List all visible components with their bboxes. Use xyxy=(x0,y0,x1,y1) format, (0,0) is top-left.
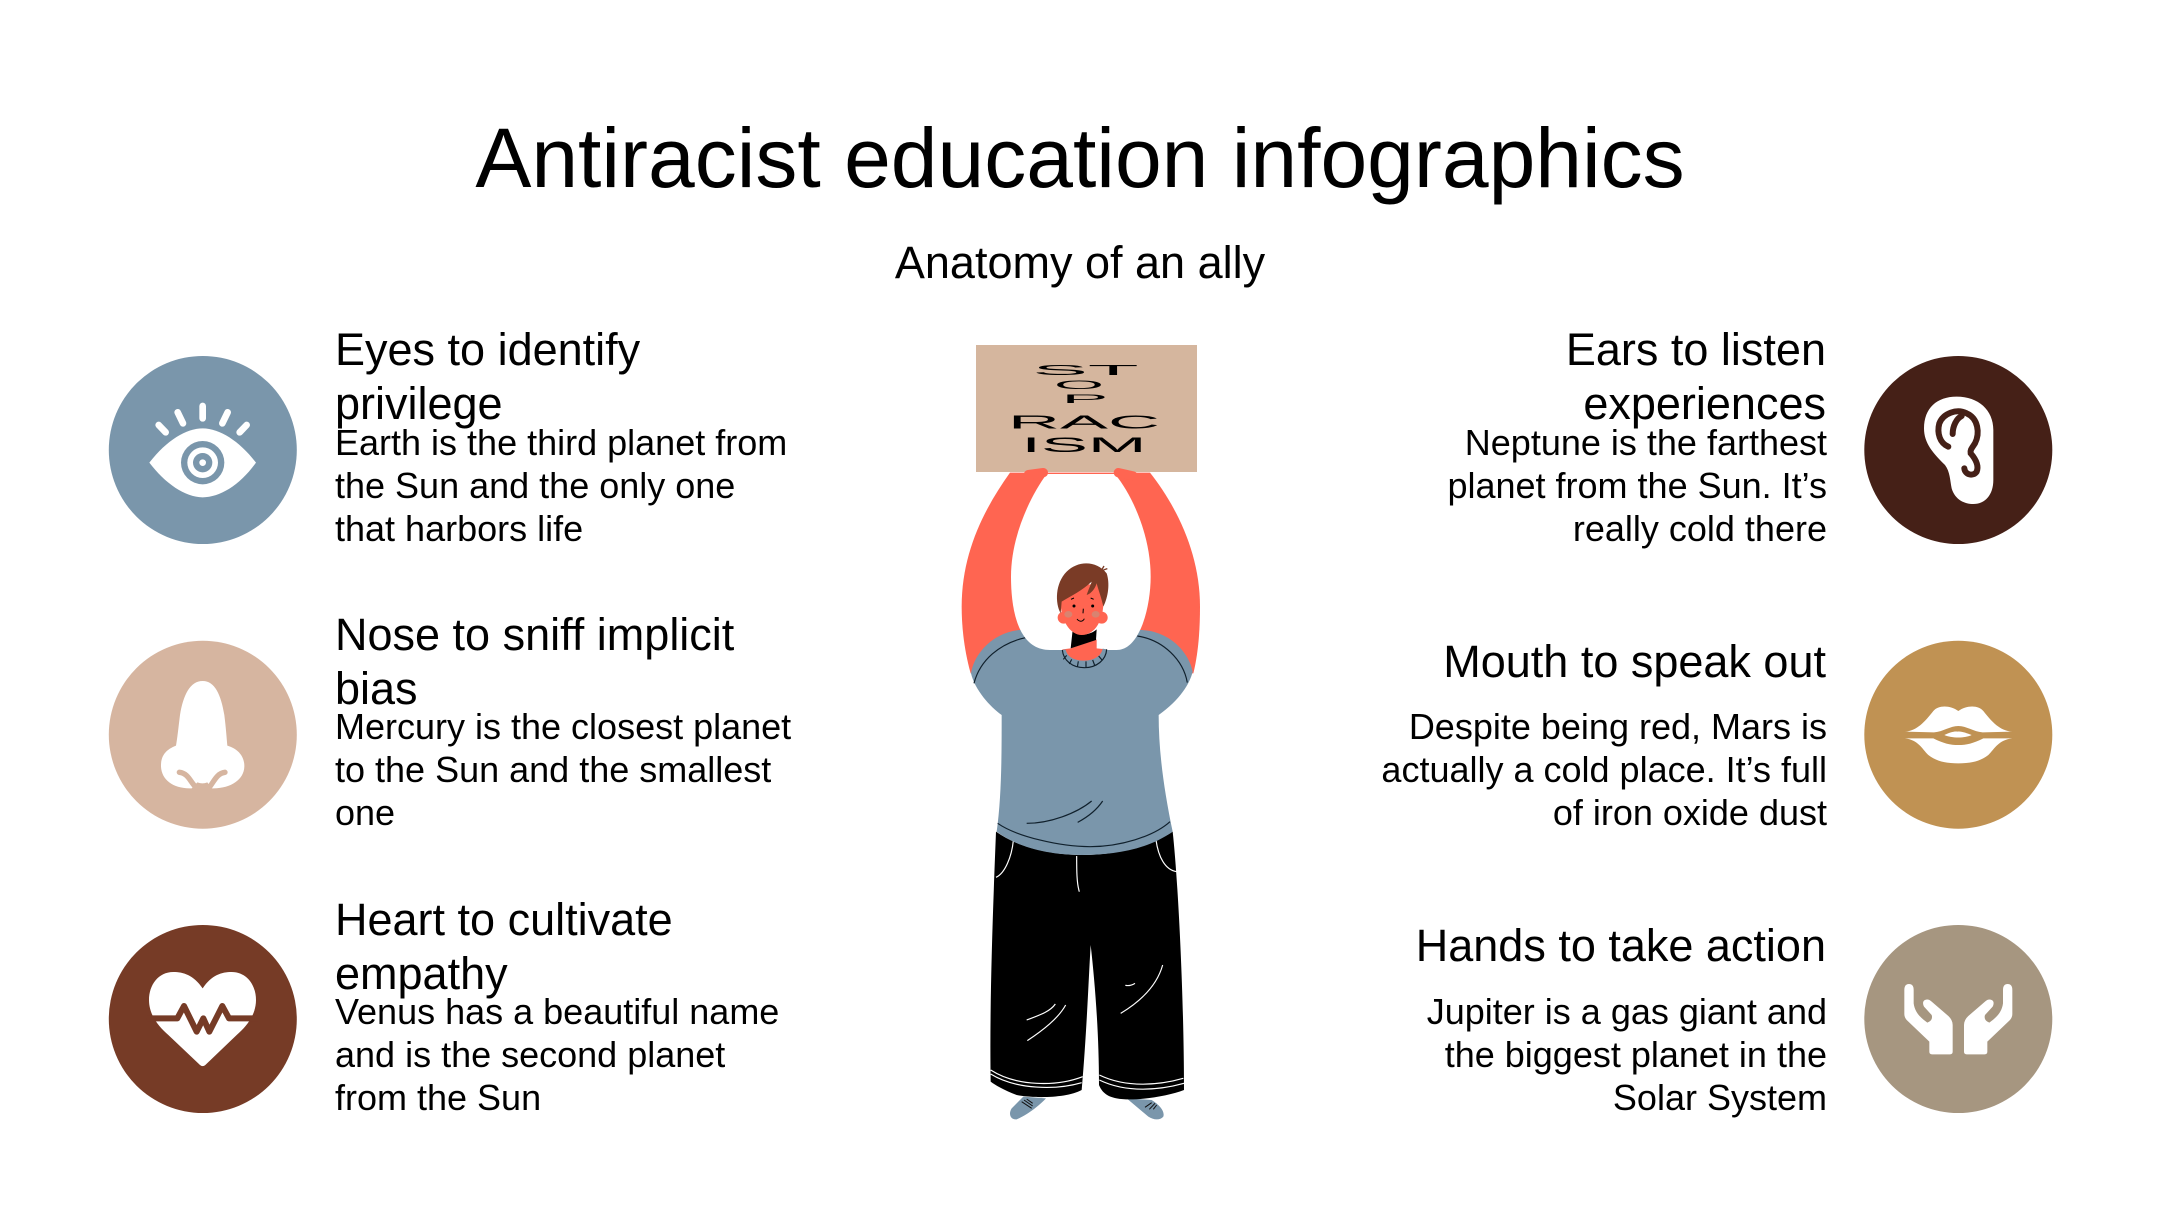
icon: lips xyxy=(1864,641,2052,829)
text: eyes: Earth is the third planet from xyxy=(335,422,787,463)
panel: hands xyxy=(1416,920,2052,1118)
text: ears: planet from the Sun. It’s xyxy=(1447,465,1827,506)
heading: nose: Nose to sniff implicit xyxy=(335,609,735,660)
heading: eyes xyxy=(335,324,641,429)
text: heart xyxy=(335,991,779,1118)
panel: nose xyxy=(109,609,791,833)
panel: ears xyxy=(1447,324,2052,549)
icon: hands xyxy=(1864,925,2052,1113)
upper body and arms xyxy=(962,473,1200,855)
text: heart: from the Sun xyxy=(335,1077,541,1118)
sign with slogan: P xyxy=(1062,393,1108,406)
sign with slogan xyxy=(976,345,1197,472)
sign with slogan: ISM xyxy=(1021,433,1147,457)
subtitle: Anatomy of an ally xyxy=(895,237,1266,288)
text: ears xyxy=(1447,422,1827,549)
heading: heart: empathy xyxy=(335,948,508,999)
heading: heart: Heart to cultivate xyxy=(335,894,673,945)
text: eyes: the Sun and the only one xyxy=(335,465,735,506)
heading: ears: Ears to listen xyxy=(1566,324,1826,375)
illustration: person holding sign xyxy=(962,345,1200,1119)
text: eyes xyxy=(335,422,787,549)
text: mouth: actually a cold place. It’s full xyxy=(1381,749,1827,790)
feet and trousers xyxy=(990,832,1184,1119)
heading: ears: experiences xyxy=(1583,378,1826,429)
panel: eyes xyxy=(109,324,787,549)
heading: nose: bias xyxy=(335,663,418,714)
text: nose: to the Sun and the smallest xyxy=(335,749,771,790)
panel: heart xyxy=(109,894,779,1118)
icon: nose xyxy=(109,641,297,829)
text: mouth: Despite being red, Mars is xyxy=(1409,706,1827,747)
heading: ears xyxy=(1566,324,1826,429)
text: hands: Jupiter is a gas giant and xyxy=(1427,991,1827,1032)
text: hands: Solar System xyxy=(1613,1077,1827,1118)
text: nose xyxy=(335,706,791,833)
text: heart: and is the second planet xyxy=(335,1034,725,1075)
text: ears: really cold there xyxy=(1573,508,1827,549)
text: hands xyxy=(1427,991,1827,1118)
heading: hands: Hands to take action xyxy=(1416,920,1826,971)
sign with slogan: ST xyxy=(1032,362,1139,378)
text: mouth xyxy=(1381,706,1827,833)
text: heart: Venus has a beautiful name xyxy=(335,991,779,1032)
icon: ear xyxy=(1864,356,2052,544)
text: mouth: of iron oxide dust xyxy=(1553,792,1827,833)
heading: eyes: privilege xyxy=(335,378,503,429)
heading: eyes: Eyes to identify xyxy=(335,324,641,375)
text: nose: one xyxy=(335,792,395,833)
text: hands: the biggest planet in the xyxy=(1445,1034,1827,1075)
sign with slogan: O xyxy=(1054,378,1104,392)
text: eyes: that harbors life xyxy=(335,508,583,549)
heading: mouth: Mouth to speak out xyxy=(1443,636,1826,687)
text: ears: Neptune is the farthest xyxy=(1465,422,1827,463)
heading: nose xyxy=(335,609,735,714)
icon: eye xyxy=(109,356,297,544)
hands and head xyxy=(1028,473,1133,668)
text: nose: Mercury is the closest planet xyxy=(335,706,791,747)
icon: heart xyxy=(109,925,297,1113)
sign with slogan: RAC xyxy=(1008,412,1160,433)
heading: heart xyxy=(335,894,673,999)
title: Antiracist education infographics xyxy=(475,111,1685,205)
panel: mouth xyxy=(1381,636,2052,833)
